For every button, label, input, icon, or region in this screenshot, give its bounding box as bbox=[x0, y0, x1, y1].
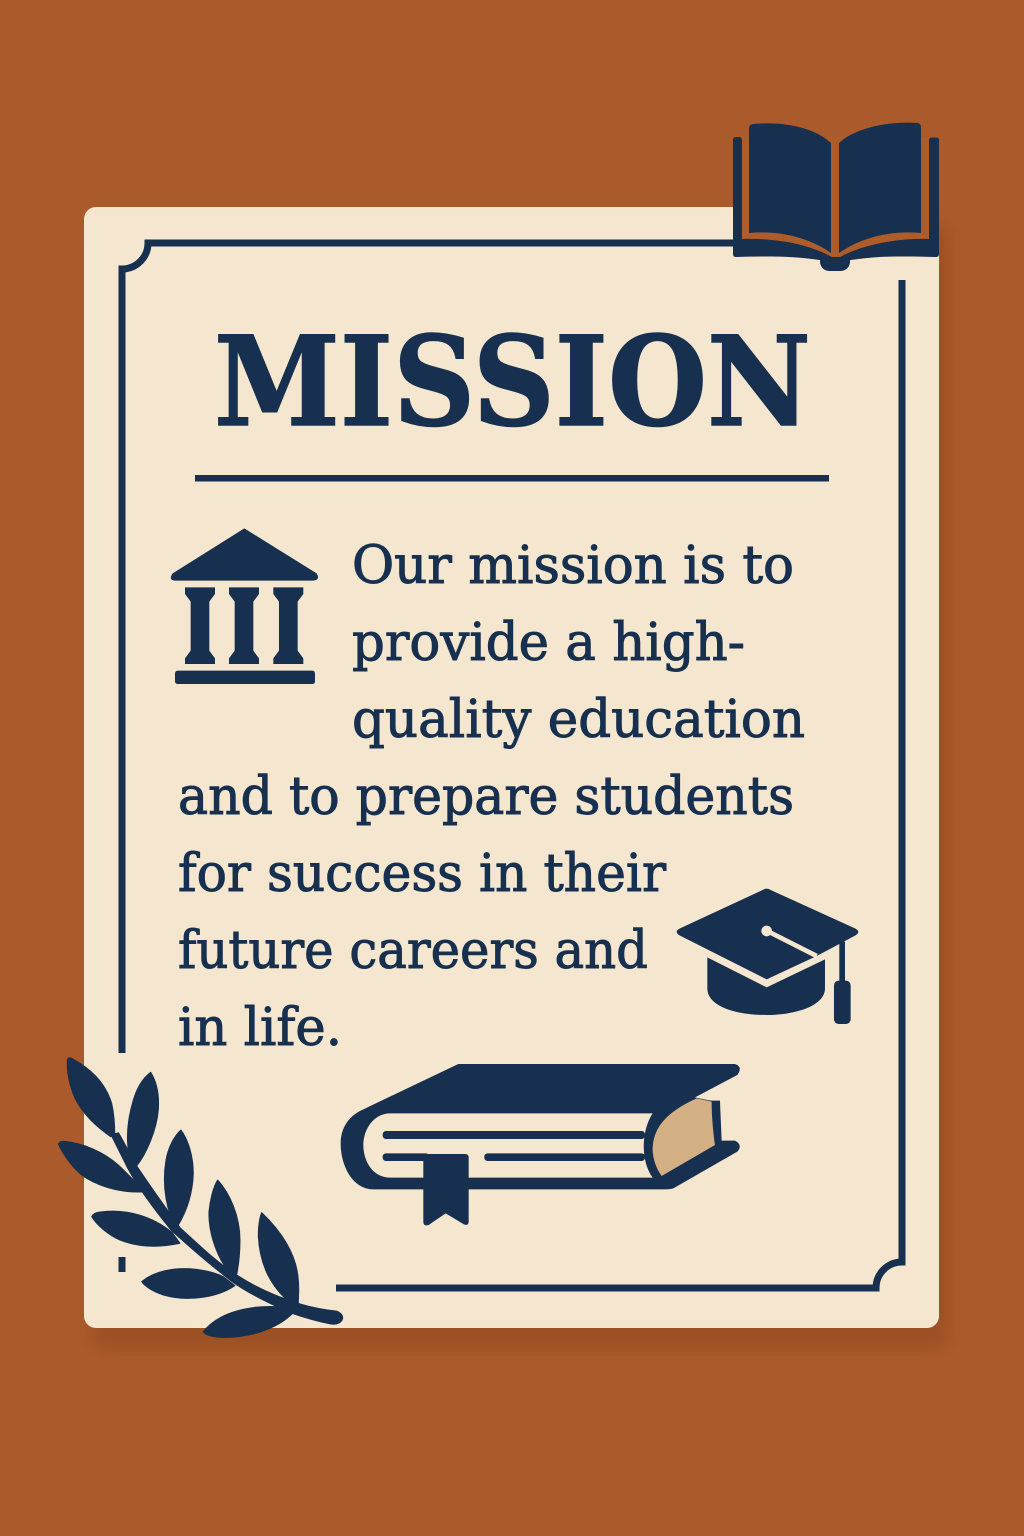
mission statement text: provide a high- bbox=[352, 613, 745, 673]
mission statement text bbox=[178, 536, 805, 1058]
mission statement text: for success in their bbox=[178, 844, 666, 904]
icon: graduation cap bbox=[677, 889, 858, 1024]
panel: cream card bbox=[84, 207, 948, 1349]
decorative frame bbox=[122, 243, 902, 1288]
heading divider bbox=[195, 475, 829, 482]
icon: institution building bbox=[171, 528, 318, 684]
mission statement text: future careers and bbox=[178, 921, 648, 981]
icon: laurel branch bbox=[58, 1058, 342, 1337]
mission statement text: quality education bbox=[352, 690, 805, 750]
mission statement text: in life. bbox=[178, 998, 342, 1058]
title: MISSION bbox=[214, 310, 811, 455]
icon: closed book with ribbon bbox=[341, 1064, 740, 1225]
icon: open book bbox=[733, 123, 939, 271]
mission statement text: Our mission is to bbox=[352, 536, 794, 596]
mission statement text: and to prepare students bbox=[178, 767, 794, 827]
